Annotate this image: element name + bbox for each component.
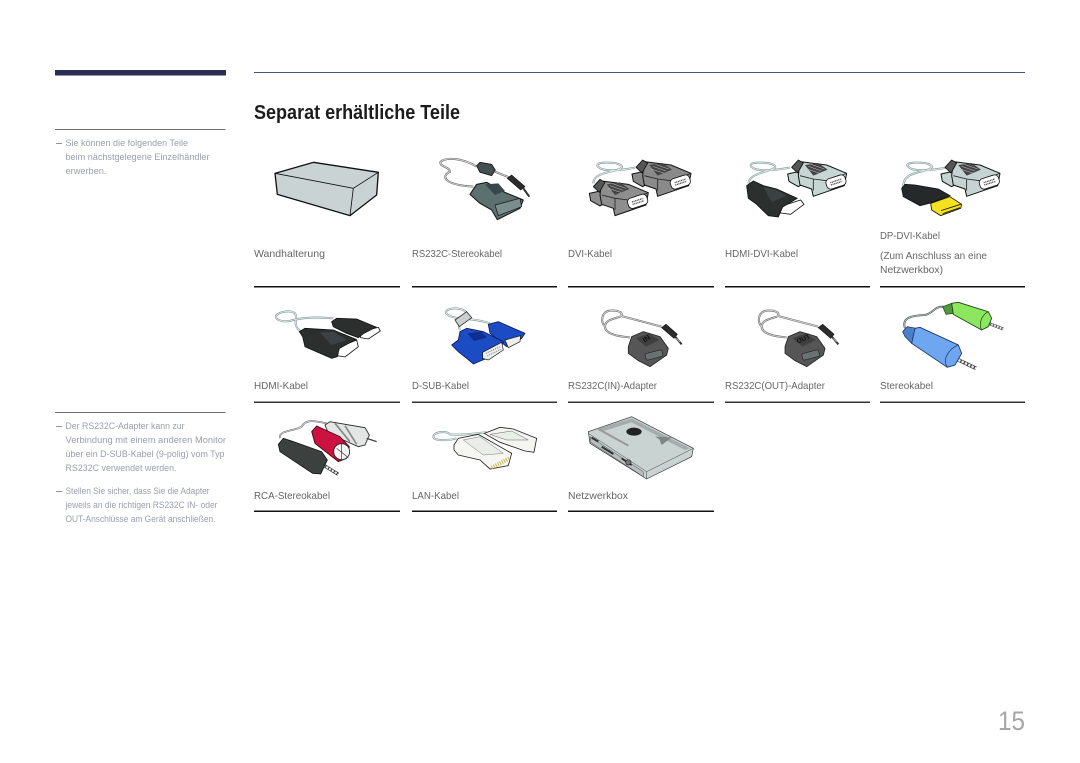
icon: RS232C IN adapter (602, 310, 682, 367)
icon: DP to DVI cable (902, 160, 1000, 216)
icon: network box (588, 417, 693, 479)
top rule (254, 72, 1025, 73)
sidebar note: availability (56, 138, 210, 176)
item: RS232C(OUT)-Adapter (725, 310, 870, 403)
item: DVI-Kabel (568, 160, 714, 288)
item: Stereokabel: Stereokabel (880, 380, 933, 392)
icon: RS232C OUT adapter (759, 310, 838, 367)
title: Separat erhältliche Teile (254, 102, 460, 124)
icon: HDMI to DVI cable (747, 160, 847, 217)
icon: RS232C IN adapter: IN (641, 333, 652, 344)
item: RCA-Stereokabel (254, 421, 400, 512)
sidebar header bar (55, 70, 226, 76)
item: Stereokabel (880, 302, 1025, 403)
item: Netzwerkbox: Netzwerkbox (568, 490, 629, 502)
sidebar note: correct ports: Stellen Sie sicher, dass Sie die Adapter (66, 486, 210, 496)
icon: RCA stereo cable (278, 421, 377, 474)
item: DP-DVI-Kabel: (Zum Anschluss an eine (880, 250, 987, 262)
item: D-SUB-Kabel: D-SUB-Kabel (412, 380, 469, 392)
sidebar note: RS232C adapter: Der RS232C-Adapter kann zur (66, 421, 184, 431)
item: Wandhalterung (254, 162, 400, 288)
icon: stereo cable (903, 302, 1003, 368)
item: RS232C(IN)-Adapter: RS232C(IN)-Adapter (568, 380, 657, 392)
sidebar note: correct ports: jeweils an die richtigen RS232C IN- oder (65, 500, 218, 510)
sidebar note: RS232C adapter: über ein D-SUB-Kabel (9-polig) vom Typ (66, 449, 224, 459)
page number: 15 (998, 706, 1025, 736)
icon: RS232C stereo cable (440, 159, 529, 220)
item: DP-DVI-Kabel (880, 160, 1025, 288)
item: DP-DVI-Kabel: Netzwerkbox) (880, 264, 943, 276)
item: DP-DVI-Kabel: DP-DVI-Kabel (880, 230, 940, 242)
item: RS232C-Stereokabel: RS232C-Stereokabel (412, 248, 502, 260)
item: LAN-Kabel (412, 427, 557, 512)
icon: HDMI cable (276, 311, 380, 358)
icon: D-SUB cable (446, 308, 525, 364)
item: HDMI-DVI-Kabel (725, 160, 870, 288)
item: RS232C-Stereokabel (412, 159, 557, 288)
sidebar note: correct ports: OUT-Anschlüsse am Gerät anschließen. (66, 514, 216, 524)
item: HDMI-DVI-Kabel: HDMI-DVI-Kabel (725, 248, 798, 260)
icon: RS232C OUT adapter: OUT (796, 333, 811, 346)
item: D-SUB-Kabel (412, 308, 557, 403)
sidebar note: availability: Sie können die folgenden Teile (66, 138, 188, 148)
item: HDMI-Kabel: HDMI-Kabel (254, 380, 308, 392)
sidebar note: RS232C adapter: RS232C verwendet werden. (66, 463, 176, 473)
item: HDMI-Kabel (254, 311, 400, 403)
item: LAN-Kabel: LAN-Kabel (412, 490, 459, 502)
sidebar note: availability: erwerben. (66, 166, 106, 176)
item: Wandhalterung: Wandhalterung (254, 248, 325, 260)
sidebar note: correct ports (56, 486, 218, 524)
sidebar note: RS232C adapter (56, 421, 226, 473)
item: RS232C(OUT)-Adapter: RS232C(OUT)-Adapter (725, 380, 825, 392)
sidebar note: RS232C adapter: Verbindung mit einem anderen Monitor (66, 435, 226, 445)
item: Netzwerkbox (568, 417, 714, 512)
item: RCA-Stereokabel: RCA-Stereokabel (254, 490, 330, 502)
sidebar note: availability: beim nächstgelegene Einzelhändler (66, 152, 210, 162)
item: RS232C(IN)-Adapter (568, 310, 714, 403)
icon: LAN cable (433, 427, 537, 469)
icon: wall mount box (275, 162, 378, 216)
item: DVI-Kabel: DVI-Kabel (568, 248, 612, 260)
icon: DVI cable (589, 160, 691, 216)
